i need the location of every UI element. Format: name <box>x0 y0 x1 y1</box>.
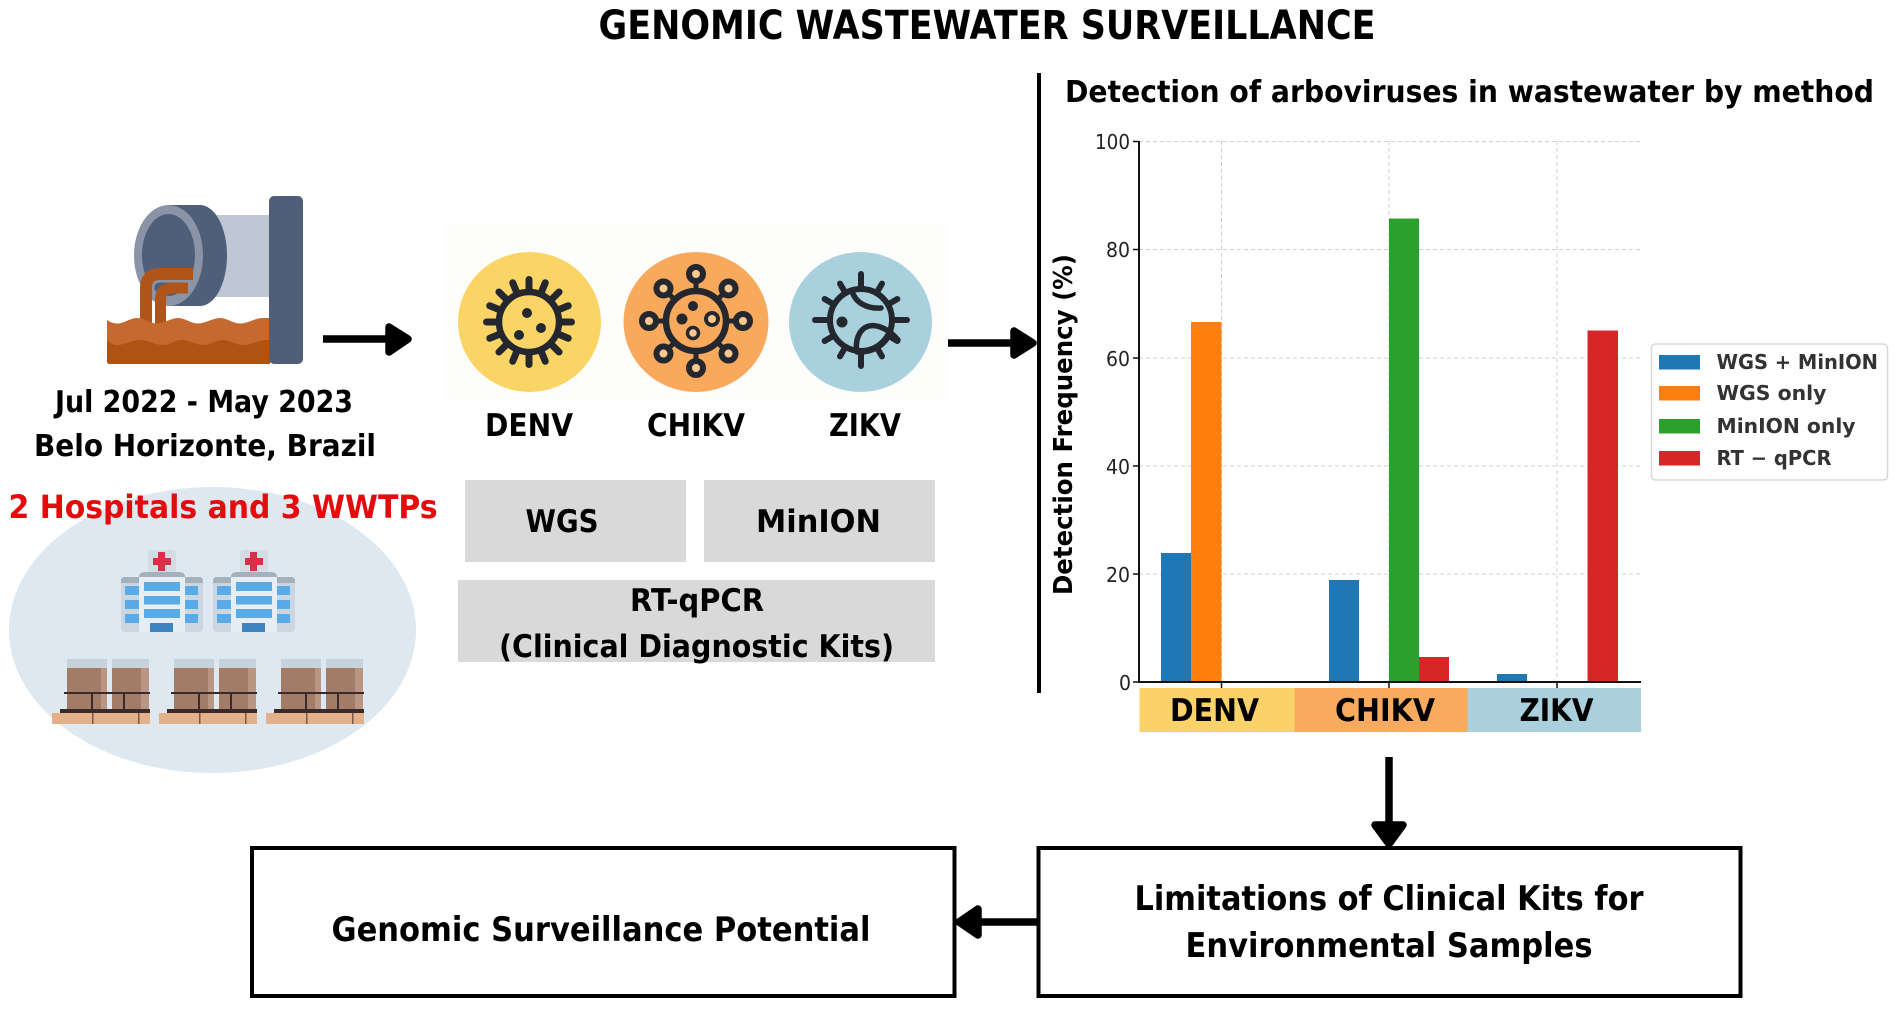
title: GENOMIC WASTEWATER SURVEILLANCE <box>598 3 1376 49</box>
legend: MinION only <box>1716 414 1856 438</box>
labels: virus names <box>485 408 901 444</box>
category band: ZIKV: ZIKV <box>1520 693 1594 729</box>
icon: ZIKV virus <box>789 252 932 392</box>
legend <box>1652 344 1888 480</box>
icon: hospital 1 <box>121 550 203 632</box>
arrow: pipe to viruses <box>323 327 408 352</box>
bar: CHIKV WGS + MinION <box>1329 580 1359 682</box>
legend: WGS + MinION <box>1716 350 1878 374</box>
bar: ZIKV RT-qPCR <box>1588 330 1618 682</box>
arrow: limitations to potential <box>959 909 1037 935</box>
box: limitations of clinical kits: Environmental Samples <box>1186 926 1592 966</box>
category band: DENV: DENV <box>1170 693 1259 729</box>
bar: ZIKV WGS + MinION <box>1497 674 1527 682</box>
bar: CHIKV RT-qPCR <box>1419 657 1449 682</box>
y axis tick labels: 0 <box>1119 671 1131 695</box>
y axis tick labels: 40 <box>1106 455 1130 479</box>
box: RT-qPCR: (Clinical Diagnostic Kits) <box>499 629 894 665</box>
icon: CHIKV virus <box>624 252 768 392</box>
box: WGS <box>465 480 686 562</box>
y axis tick labels: 20 <box>1106 563 1130 587</box>
icon: DENV virus <box>458 252 601 392</box>
sampling sites ellipse <box>9 487 416 773</box>
icon: hospital 2 <box>213 550 295 632</box>
box: MinION <box>704 480 935 562</box>
arrow: viruses to chart <box>948 331 1033 355</box>
category band: CHIKV <box>1294 688 1468 732</box>
text: study period and location: Belo Horizonte, Brazil <box>34 429 376 464</box>
category band: ZIKV <box>1468 688 1641 732</box>
box: limitations of clinical kits: Limitations of Clinical Kits for <box>1134 879 1644 919</box>
icon: treatment plant 1 <box>52 659 150 724</box>
legend: WGS only <box>1716 381 1826 405</box>
box: genomic surveillance potential: Genomic Surveillance Potential <box>332 910 870 950</box>
text: study period and location <box>34 385 376 464</box>
text: study period and location: Jul 2022 - May 2023 <box>53 385 353 420</box>
panel: virus icons background <box>444 225 948 400</box>
legend: RT − qPCR <box>1716 446 1832 470</box>
y axis tick labels: 100 <box>1095 130 1130 154</box>
labels: virus names: ZIKV <box>829 408 901 444</box>
box: RT-qPCR <box>458 580 935 665</box>
labels: virus names: DENV <box>485 408 573 444</box>
icon: sewage pipe discharging wastewater <box>107 196 303 364</box>
labels: virus names: CHIKV <box>647 408 745 444</box>
bar: DENV WGS + MinION <box>1161 553 1191 682</box>
box: limitations of clinical kits <box>1038 848 1740 996</box>
icon: treatment plant 2 <box>159 659 257 724</box>
box: genomic surveillance potential <box>252 848 954 996</box>
bar: DENV WGS only <box>1191 322 1222 682</box>
bar chart <box>1095 130 1641 695</box>
y axis tick labels <box>1095 130 1131 695</box>
y axis label: Detection Frequency (%) <box>1049 254 1079 595</box>
heading: sampling sites: 2 Hospitals and 3 WWTPs <box>8 488 438 526</box>
icon: treatment plant 3 <box>266 659 364 724</box>
box: MinION: MinION <box>756 504 881 540</box>
y axis tick labels: 80 <box>1106 238 1130 262</box>
category band: DENV <box>1140 688 1294 732</box>
y axis tick labels: 60 <box>1106 347 1130 371</box>
box: WGS: WGS <box>526 504 598 540</box>
arrow: chart to limitations <box>1375 757 1403 844</box>
category band: CHIKV: CHIKV <box>1335 693 1435 729</box>
box: RT-qPCR: RT-qPCR <box>630 583 764 619</box>
bar: CHIKV MinION only <box>1389 218 1419 682</box>
